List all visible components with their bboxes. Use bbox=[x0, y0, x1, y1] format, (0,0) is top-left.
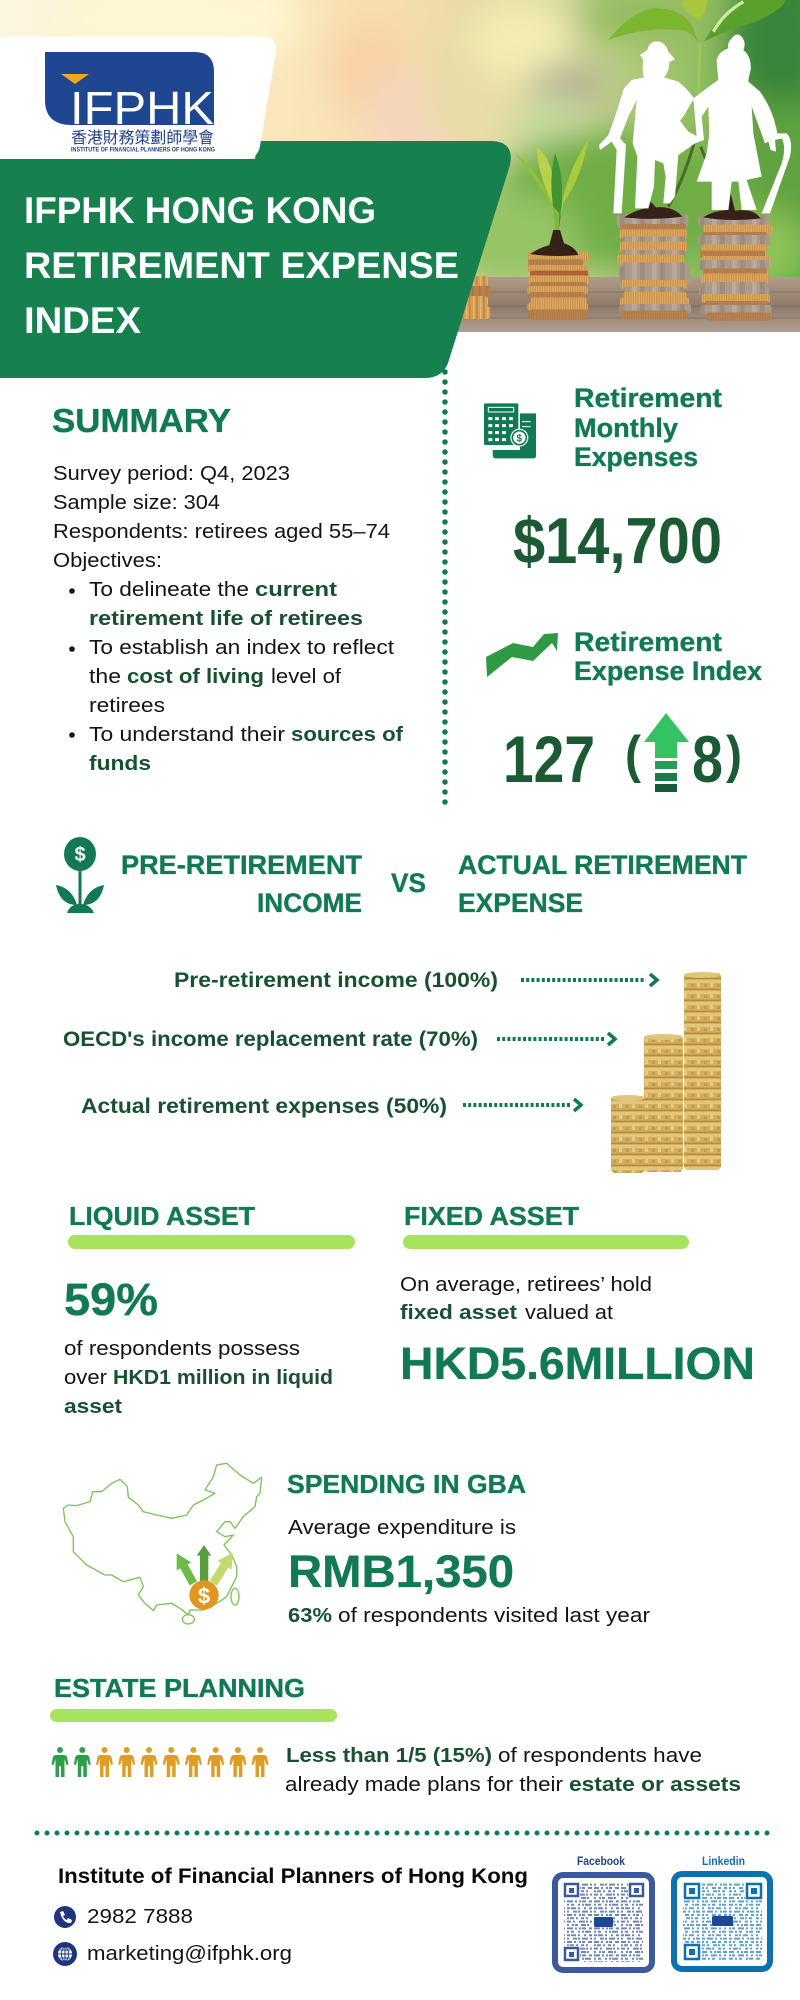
paper cut-out: elderly man with cane bbox=[599, 41, 704, 213]
panel: retirement expense index bbox=[486, 627, 762, 796]
objectives list: retirement life of retirees bbox=[89, 608, 363, 630]
label: Linkedin: Linkedin bbox=[702, 1854, 745, 1868]
objectives list: sources of bbox=[291, 724, 403, 746]
summary heading: SUMMARY bbox=[52, 402, 231, 439]
figure: monthly expense: $14,700 bbox=[513, 504, 722, 577]
heading: spending in GBA: SPENDING IN GBA bbox=[287, 1469, 526, 1499]
logo english name: INSTITUTE OF FINANCIAL PLANNERS OF HONG KONG bbox=[71, 148, 215, 154]
map of China with spending arrows bbox=[63, 1463, 262, 1624]
label: replacement rate: OECD's income replacement rate (70%) bbox=[63, 1028, 478, 1051]
objectives list: To understand their bbox=[89, 724, 285, 746]
coin stack: right bbox=[698, 215, 772, 321]
figure: RMB1,350: RMB1,350 bbox=[288, 1546, 514, 1597]
pictogram: ten people, two highlighted bbox=[52, 1747, 268, 1777]
icon: up arrow bbox=[644, 713, 689, 792]
liquid asset description: over bbox=[64, 1367, 107, 1389]
figure: 59%: 59% bbox=[64, 1274, 158, 1325]
footer: contact details bbox=[53, 1865, 528, 1966]
heading: pre-retirement income: INCOME bbox=[257, 888, 362, 918]
icon: money plant: $ bbox=[74, 844, 86, 866]
panel: summary bbox=[52, 402, 403, 775]
panel: fixed asset bbox=[400, 1201, 755, 1389]
objectives list: To establish an index to reflect bbox=[89, 637, 394, 659]
paper cut-out: elderly woman with cane bbox=[693, 35, 791, 213]
heading: estate planning: ESTATE PLANNING bbox=[54, 1673, 305, 1703]
heading: retirement expense index bbox=[574, 627, 762, 686]
title panel bbox=[0, 141, 511, 378]
heading: retirement monthly expenses: Monthly bbox=[574, 413, 678, 443]
heading: retirement monthly expenses bbox=[574, 383, 722, 472]
heading: retirement expense index: Expense Index bbox=[574, 656, 762, 686]
gold coin stacks bbox=[611, 972, 721, 1173]
estate planning description: Less than 1/5 (15%) bbox=[286, 1745, 492, 1767]
email address: marketing@ifphk.org bbox=[87, 1943, 292, 1965]
coin stack: left bbox=[527, 252, 590, 320]
survey facts bbox=[53, 463, 390, 572]
fixed asset description bbox=[400, 1274, 652, 1324]
objectives list bbox=[69, 579, 403, 775]
liquid asset description: of respondents possess bbox=[64, 1338, 300, 1360]
figure: index value: 127 bbox=[503, 722, 595, 796]
logo mark bbox=[45, 52, 214, 125]
label: pre-retirement income: Pre-retirement income (100%) bbox=[174, 969, 498, 992]
objectives list: current bbox=[255, 579, 337, 601]
logo chinese name: 香港財務策劃師學會 bbox=[71, 128, 214, 147]
icon: money plant bbox=[56, 837, 104, 913]
icon: rising arrow bbox=[486, 633, 558, 677]
label: Facebook: Facebook bbox=[577, 1854, 625, 1868]
title text: INDEX bbox=[24, 300, 141, 341]
heading: actual retirement expense: ACTUAL RETIREMENT bbox=[458, 850, 747, 880]
heading: fixed asset: FIXED ASSET bbox=[404, 1201, 579, 1231]
title text bbox=[24, 190, 459, 341]
text: visit share: of respondents visited last year bbox=[338, 1605, 650, 1627]
icon: calculator and coin: $ bbox=[517, 433, 523, 444]
panel: retirement monthly expenses bbox=[484, 383, 722, 577]
figure: index value bbox=[503, 722, 742, 796]
liquid asset description: asset bbox=[64, 1396, 122, 1418]
figure: index value: ( bbox=[625, 726, 642, 784]
fixed asset description: fixed asset bbox=[400, 1302, 517, 1324]
large plant with leaves bbox=[608, 0, 785, 207]
liquid asset description: HKD1 million in liquid bbox=[113, 1367, 333, 1389]
arrow: replacement rate bbox=[497, 1033, 615, 1045]
arrow: actual expenses bbox=[463, 1099, 581, 1111]
heading: retirement monthly expenses: Retirement bbox=[574, 383, 722, 413]
objectives list: funds bbox=[89, 753, 151, 775]
liquid asset description bbox=[64, 1338, 333, 1418]
panel: pre-retirement income vs actual retirement expense bbox=[56, 837, 747, 918]
organisation name: Institute of Financial Planners of Hong Kong bbox=[58, 1865, 528, 1888]
small stack of coins behind the title panel bbox=[462, 276, 491, 319]
phone number: 2982 7888 bbox=[87, 1906, 193, 1928]
soil bbox=[530, 193, 761, 256]
heading bar bbox=[68, 1235, 355, 1249]
coin stack: middle bbox=[617, 214, 691, 319]
panel: estate planning bbox=[50, 1673, 741, 1796]
logo lettering: IFPHK bbox=[70, 82, 214, 134]
figure: index value: ) bbox=[726, 726, 742, 784]
fixed asset description: valued at bbox=[525, 1302, 613, 1324]
heading bar bbox=[50, 1709, 337, 1722]
title text: IFPHK HONG KONG bbox=[24, 190, 376, 231]
small plant bbox=[515, 140, 588, 233]
horizontal dotted divider bbox=[37, 1830, 775, 1836]
heading: actual retirement expense: EXPENSE bbox=[458, 888, 583, 918]
objectives list: cost of living bbox=[127, 666, 264, 688]
label: actual expenses: Actual retirement expenses (50%) bbox=[81, 1095, 447, 1118]
objectives list: level of bbox=[271, 666, 341, 688]
fixed asset description: On average, retirees’ hold bbox=[400, 1274, 652, 1296]
heading: pre-retirement income bbox=[121, 850, 363, 918]
map of China with spending arrows: $ bbox=[198, 1583, 210, 1608]
logo triangle bbox=[61, 74, 89, 84]
survey facts: Sample size: 304 bbox=[53, 492, 220, 514]
income comparison labels with arrows bbox=[63, 969, 657, 1118]
survey facts: Objectives: bbox=[53, 550, 162, 572]
heading bar bbox=[403, 1235, 689, 1249]
vertical dotted divider bbox=[442, 362, 448, 805]
heading: pre-retirement income: PRE-RETIREMENT bbox=[121, 850, 363, 880]
QR code: Linkedin bbox=[674, 1854, 770, 1969]
survey facts: Respondents: retirees aged 55–74 bbox=[53, 521, 390, 543]
text: visit share: 63% bbox=[288, 1605, 332, 1627]
heading: retirement expense index: Retirement bbox=[574, 627, 722, 657]
arrow: pre-retirement income bbox=[521, 974, 657, 986]
estate planning description bbox=[285, 1745, 741, 1796]
estate planning description: of respondents have bbox=[498, 1745, 702, 1767]
objectives list: retirees bbox=[89, 695, 165, 717]
hero photo: coins, plants and elderly couple bbox=[0, 0, 800, 332]
figure: fixed asset value: HKD5.6MILLION bbox=[400, 1338, 755, 1389]
heading: liquid asset: LIQUID ASSET bbox=[69, 1201, 255, 1231]
title text: RETIREMENT EXPENSE bbox=[24, 245, 459, 286]
icon: phone bbox=[54, 1906, 76, 1928]
objectives list: the bbox=[89, 666, 121, 688]
heading: vs: VS bbox=[391, 868, 426, 898]
panel: spending in GBA bbox=[63, 1463, 650, 1627]
icon: globe bbox=[53, 1942, 77, 1966]
survey facts: Survey period: Q4, 2023 bbox=[53, 463, 290, 485]
QR code: Facebook bbox=[555, 1854, 652, 1970]
icon: calculator and coin bbox=[484, 403, 536, 458]
panel: liquid asset bbox=[64, 1201, 355, 1418]
objectives list: To delineate the bbox=[89, 579, 249, 601]
heading: retirement monthly expenses: Expenses bbox=[574, 442, 698, 472]
figure: index value: 8 bbox=[692, 722, 723, 796]
logo card bbox=[0, 37, 276, 159]
estate planning description: already made plans for their bbox=[285, 1774, 563, 1796]
text: average expenditure: Average expenditure is bbox=[288, 1517, 516, 1539]
estate planning description: estate or assets bbox=[569, 1774, 741, 1796]
heading: actual retirement expense bbox=[458, 850, 747, 918]
